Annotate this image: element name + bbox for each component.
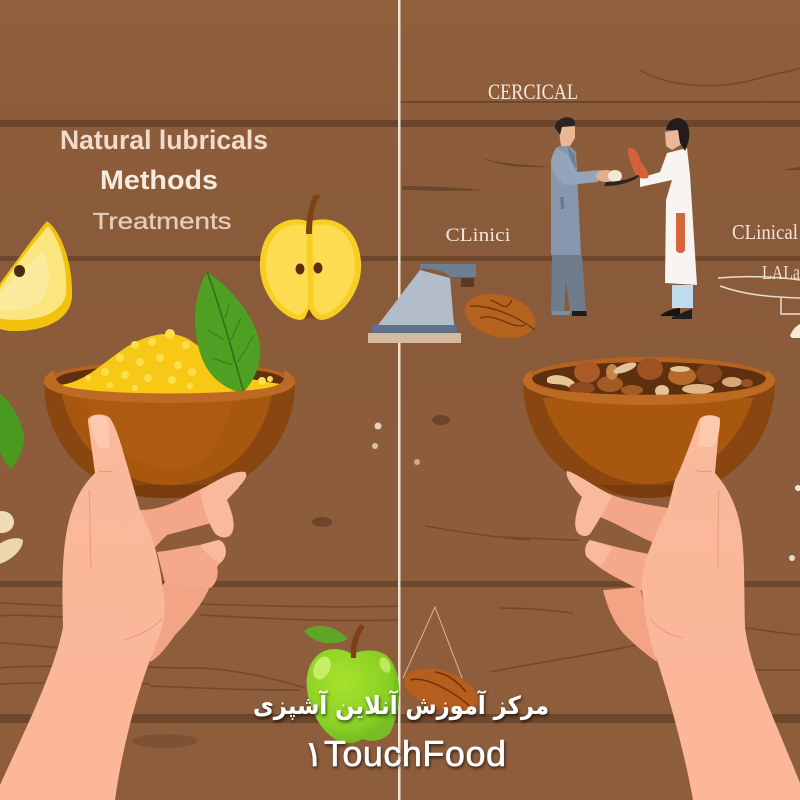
left hand holding bowl — [0, 415, 246, 800]
right heading: CERCICAL: CERCICAL — [488, 79, 578, 104]
footer text: TouchFood brand: ۱TouchFood — [304, 733, 506, 774]
nuts at left edge — [0, 511, 23, 565]
label: lab mark — [718, 262, 800, 338]
left heading: Natural Methods Treatments: Treatments — [92, 208, 232, 234]
label: Clinici left: CLinici — [446, 225, 510, 246]
figure: man in grey coat — [551, 117, 622, 316]
figure: doctor in white coat — [604, 118, 697, 319]
yellow grain — [60, 329, 280, 394]
left heading: Natural Methods Treatments: Methods — [100, 165, 218, 195]
icon: hanging date with strings — [399, 607, 483, 720]
right bowl with nuts — [522, 357, 775, 498]
green leaf — [195, 272, 260, 393]
bowl front rim — [44, 370, 295, 403]
left heading: Natural Methods Treatments — [60, 125, 268, 234]
icon: walnut — [460, 287, 540, 345]
icon: yellow apple slice — [0, 221, 72, 331]
nuts — [547, 358, 753, 397]
icon: halved yellow apple — [260, 194, 361, 320]
icon: grey machine — [368, 264, 476, 343]
left bowl with yellow grain and leaf — [44, 272, 296, 498]
center divider — [398, 0, 400, 800]
footer text: Persian caption: مرکز آموزش آنلاین آشپزی — [253, 690, 549, 721]
right hand holding bowl — [567, 415, 800, 800]
left heading: Natural Methods Treatments: Natural lubricals — [60, 125, 268, 155]
icon: green apple — [304, 625, 399, 743]
leaf at left edge — [0, 394, 24, 469]
